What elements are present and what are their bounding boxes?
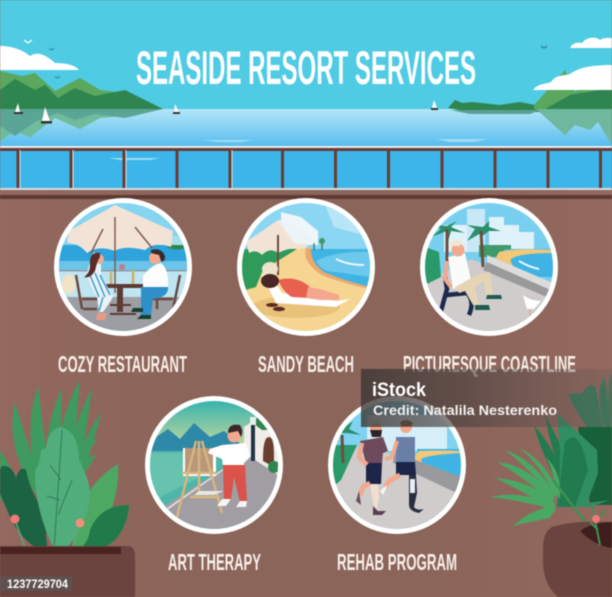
left jogger: [360, 437, 388, 463]
label: REHAB PROGRAM: [337, 549, 457, 575]
icon: dark front leaf: [70, 505, 129, 553]
sand: [242, 248, 370, 331]
watermark: Credit: Natalila Nesterenko: [373, 402, 557, 418]
sunbather: [278, 279, 310, 298]
table: [106, 283, 144, 316]
left cloud: [0, 46, 79, 70]
painter: [208, 443, 250, 466]
green plants: [242, 249, 297, 291]
promenade ground: [0, 188, 612, 597]
label: ART THERAPY: [168, 549, 261, 575]
easel: [177, 441, 222, 517]
promenade: [164, 456, 278, 530]
left pot: [0, 546, 135, 597]
umbrella: [246, 220, 308, 255]
panel: seaside background: [0, 0, 612, 189]
right pot: [543, 522, 612, 597]
panel: picturesque coastline circle: [420, 198, 558, 336]
promenade: [425, 259, 553, 331]
palms far: [314, 242, 322, 250]
lamp: [251, 423, 255, 461]
panel: art therapy circle: [145, 396, 283, 534]
bench: [441, 277, 472, 315]
right plant: [490, 372, 612, 597]
panel: rehab program circle: [328, 396, 466, 534]
right hills and reflection: [448, 65, 612, 145]
umbrella: [67, 205, 173, 253]
label: COZY RESTAURANT: [58, 351, 187, 377]
label: SANDY BEACH: [258, 351, 354, 377]
lounger: [262, 271, 350, 307]
icon: dark left leaf: [0, 466, 48, 553]
watermark: [361, 369, 612, 427]
man: [143, 263, 168, 287]
right clouds: [533, 38, 612, 90]
railing: [0, 146, 612, 188]
candles: [111, 270, 133, 284]
chairs: [76, 275, 180, 309]
image id tag: 1237729704: [7, 577, 68, 591]
birds: [24, 40, 547, 78]
watermark: iStock: [372, 380, 426, 401]
white building: [243, 422, 278, 475]
woman: [87, 253, 113, 312]
palms: [432, 220, 501, 242]
icon: large center leaf: [35, 427, 90, 553]
sailboats: [14, 100, 438, 124]
sandals: [266, 303, 278, 307]
canvas: [183, 448, 216, 476]
panel: sandy beach circle: [237, 198, 375, 336]
left plant: [0, 380, 129, 553]
right jogger: [396, 437, 415, 462]
panel: cozy restaurant circle: [54, 198, 192, 336]
icon: back right leaf: [72, 464, 118, 553]
icon: pink flowers: [10, 514, 84, 553]
left hills and reflection: [0, 71, 163, 141]
seagull: [523, 295, 541, 309]
man: [448, 253, 472, 289]
